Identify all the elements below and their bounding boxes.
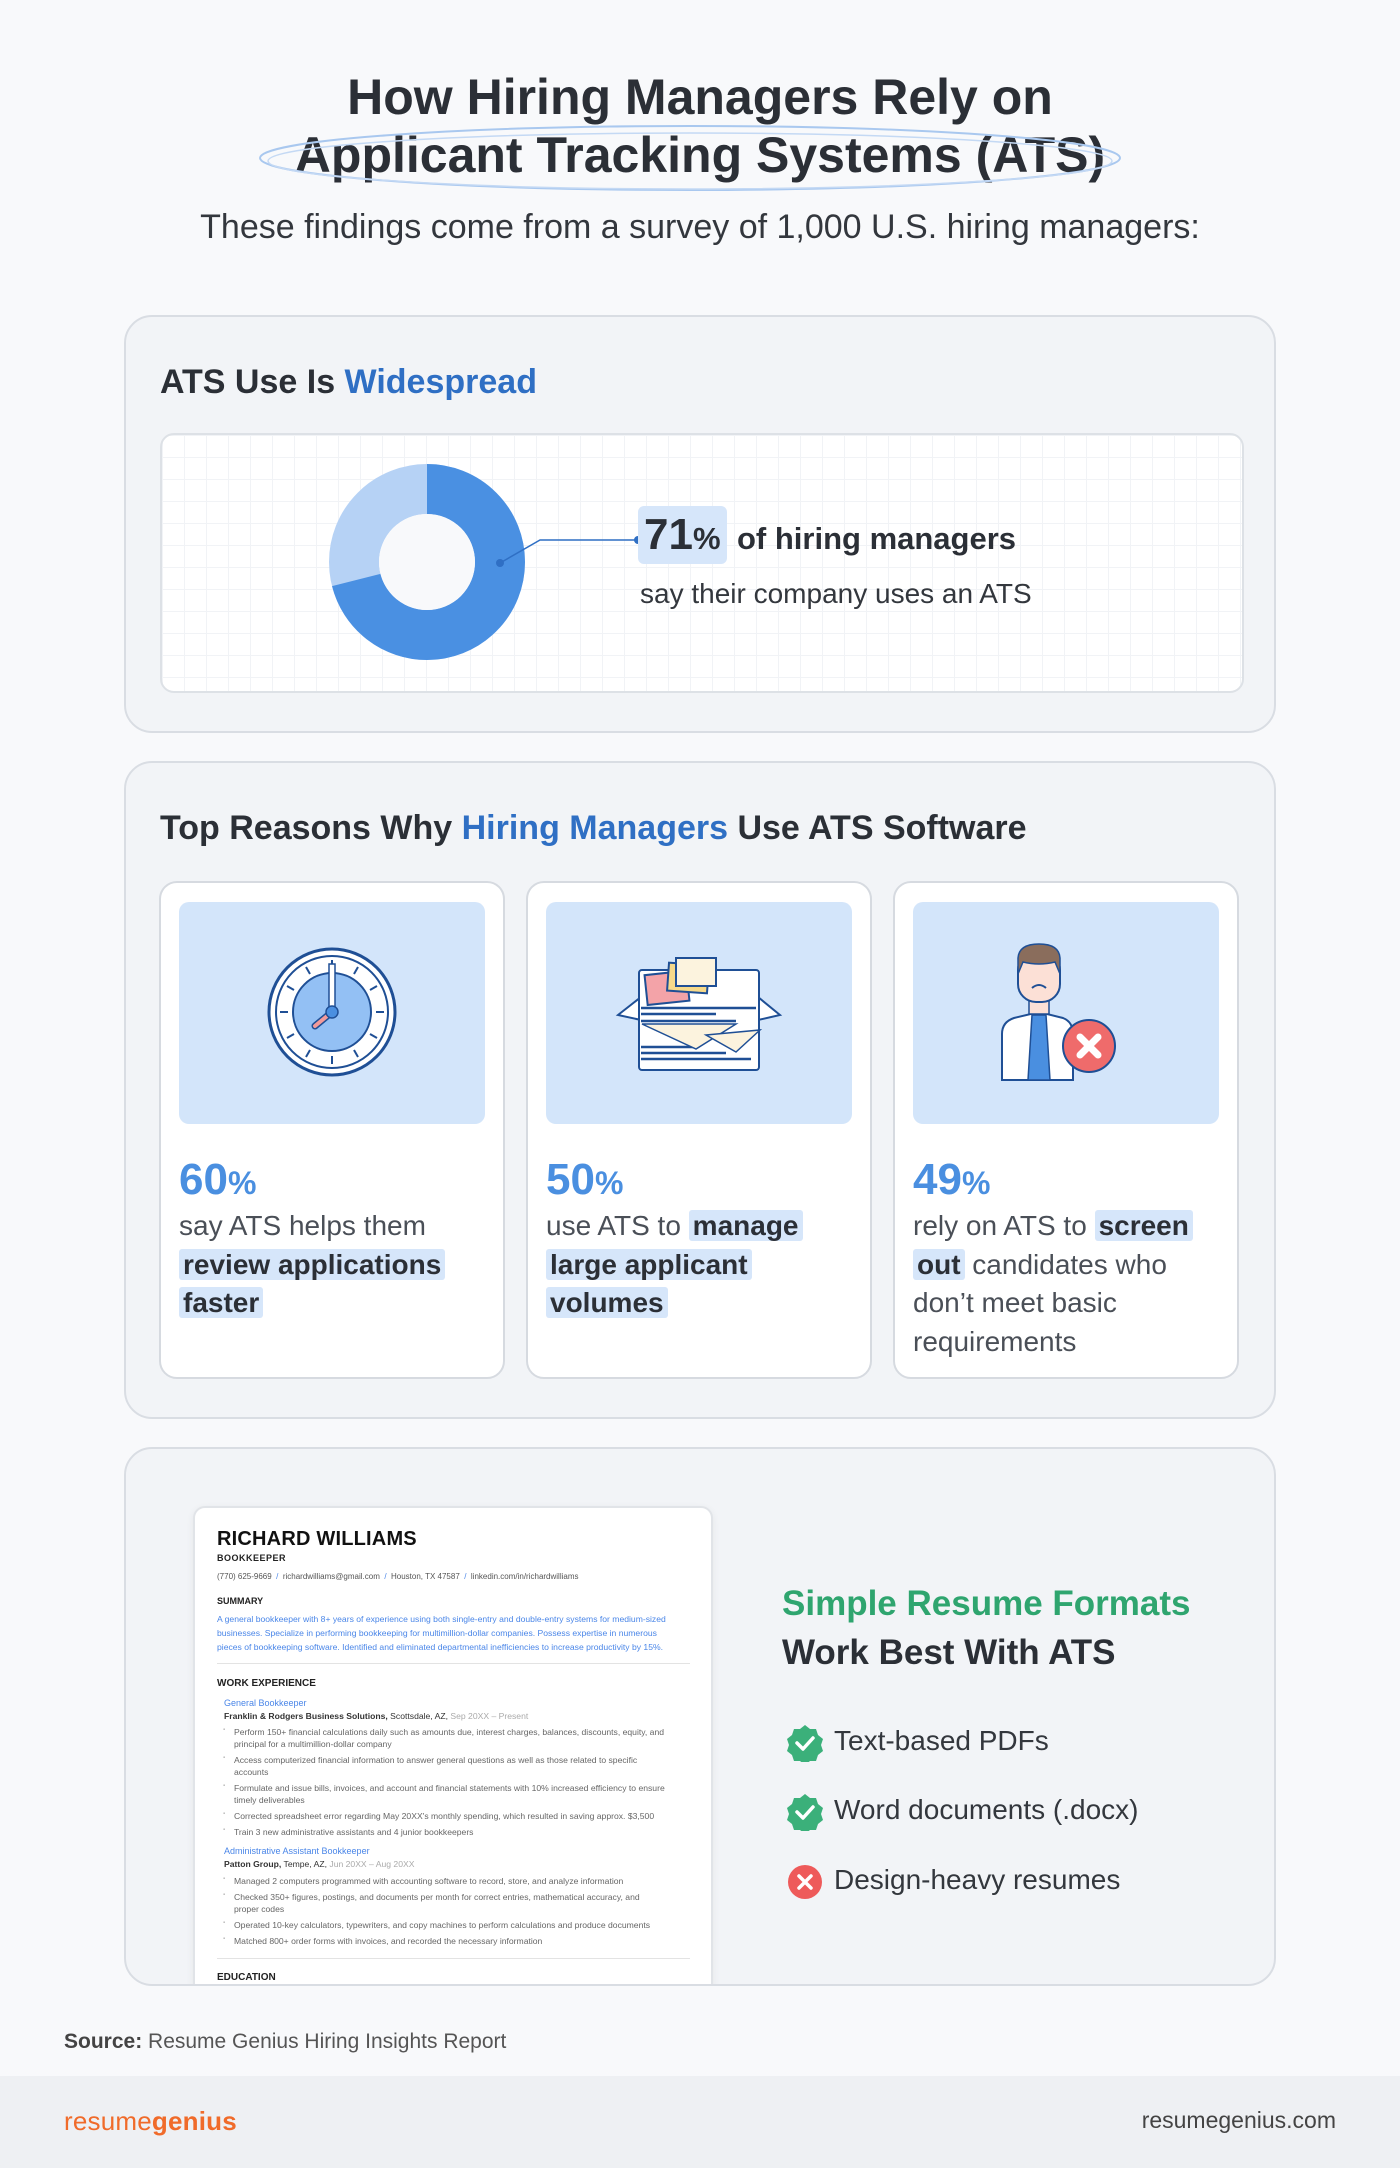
stat text: of hiring managers (737, 521, 1016, 556)
resume sample: Access computerized financial information to answer general questions as well as those related to specific (234, 1755, 637, 1765)
description: rely on ATS to screen out candidates who don’t meet basic requirements (913, 1210, 1189, 1357)
resume sample: Managed 2 computers programmed with accounting software to record, store, and analyze information (234, 1876, 623, 1886)
item: text PDFs (787, 1725, 1049, 1762)
card: 50% (526, 881, 872, 1379)
chart card (160, 433, 1244, 693)
resume sample: Matched 800+ order forms with invoices, and recorded the necessary information (234, 1936, 542, 1946)
stat: 49% (913, 1155, 990, 1204)
icon: clock (179, 902, 485, 1124)
stat: 60% (179, 1155, 256, 1204)
description: say ATS helps them review applications faster (179, 1210, 441, 1318)
resume sample: (770) 625-9669 / richardwilliams@gmail.com / Houston, TX 47587 / linkedin.com/in/richardwilliams (217, 1572, 579, 1581)
website: resumegenius.com (1142, 2107, 1336, 2133)
title highlight ellipse (259, 125, 1121, 191)
footer (0, 2076, 1400, 2168)
resume sample: accounts (234, 1767, 268, 1777)
resume sample: General Bookkeeper (224, 1698, 307, 1708)
panel: simple resume formats (124, 1447, 1276, 1986)
panel: ATS use widespread (124, 315, 1276, 733)
title (295, 69, 1105, 183)
icon: papers (546, 902, 852, 1124)
resume sample: Formulate and issue bills, invoices, and account and financial statements with 10% increased efficiency to ensure (234, 1783, 665, 1793)
connector line (496, 536, 638, 567)
heading: Work Best With ATS (782, 1633, 1116, 1672)
resume sample: Perform 150+ financial calculations daily such as amounts due, interest charges, balances, discounts, equity, and (234, 1727, 664, 1737)
resume sample: SUMMARY (217, 1596, 263, 1606)
resume sample: principal for a multimillion-dollar company (234, 1739, 392, 1749)
resume sample: Franklin & Rodgers Business Solutions, Scottsdale, AZ, Sep 20XX – Present (224, 1711, 528, 1721)
resume sample: Patton Group, Tempe, AZ, Jun 20XX – Aug 20XX (224, 1859, 414, 1869)
resume sample: proper codes (234, 1904, 284, 1914)
source note: Source: Resume Genius Hiring Insights Report (64, 2030, 506, 2053)
title: How Hiring Managers Rely on (347, 69, 1053, 125)
resume sample: businesses. Specialize in performing bookkeeping for multimillion-dollar companies. Possess expertise in numerous (217, 1628, 657, 1638)
format list (787, 1725, 1138, 1899)
resume sample: WORK EXPERIENCE (217, 1678, 316, 1689)
resume sample: Corrected spreadsheet error regarding May 20XX's monthly spending, which resulted in saving approx. $3,500 (234, 1811, 654, 1821)
resume sample: Train 3 new administrative assistants and 4 junior bookkeepers (234, 1827, 473, 1837)
resume sample (193, 1506, 713, 2026)
panel: top reasons (124, 761, 1276, 1419)
heading (782, 1584, 1190, 1672)
resume sample: pieces of bookkeeping software. Identified and eliminated departmental inefficiencies to increase productivity by 15%. (217, 1642, 663, 1652)
resume sample: A general bookkeeper with 8+ years of experience using both single-entry and double-entry systems for medium-sized (217, 1614, 666, 1624)
heading: Top Reasons Why Hiring Managers Use ATS Software (160, 809, 1027, 847)
resume sample: Checked 350+ figures, postings, and documents per month for correct entries, mathematical accuracy, and (234, 1892, 640, 1902)
icon: rejected person (913, 902, 1219, 1124)
logo: resumegenius (64, 2106, 237, 2136)
resume sample: RICHARD WILLIAMS (217, 1528, 417, 1550)
item: word docs: Word documents (.docx) (834, 1794, 1138, 1825)
resume sample: timely deliverables (234, 1795, 305, 1805)
resume sample: BOOKKEEPER (217, 1553, 286, 1563)
resume sample: Operated 10-key calculators, typewriters, and copy machines to perform calculations and produce documents (234, 1920, 650, 1930)
donut chart (329, 464, 525, 660)
item: text PDFs: Text-based PDFs (834, 1725, 1049, 1756)
stat text (638, 506, 1016, 564)
resume sample: EDUCATION (217, 1972, 276, 1983)
heading: ATS Use Is Widespread (160, 363, 537, 401)
heading: Simple Resume Formats (782, 1584, 1190, 1623)
card: 60% (159, 881, 505, 1379)
title: Applicant Tracking Systems (ATS) (295, 127, 1105, 183)
item: design heavy: Design-heavy resumes (834, 1864, 1120, 1895)
stat text: 71% (644, 510, 721, 559)
chart card: say their company uses an ATS (640, 578, 1032, 609)
stat: 50% (546, 1155, 623, 1204)
description: use ATS to manage large applicant volumes (546, 1210, 798, 1318)
resume sample: Administrative Assistant Bookkeeper (224, 1846, 370, 1856)
subtitle: These findings come from a survey of 1,000 U.S. hiring managers: (200, 208, 1200, 246)
card: 49% (893, 881, 1239, 1379)
